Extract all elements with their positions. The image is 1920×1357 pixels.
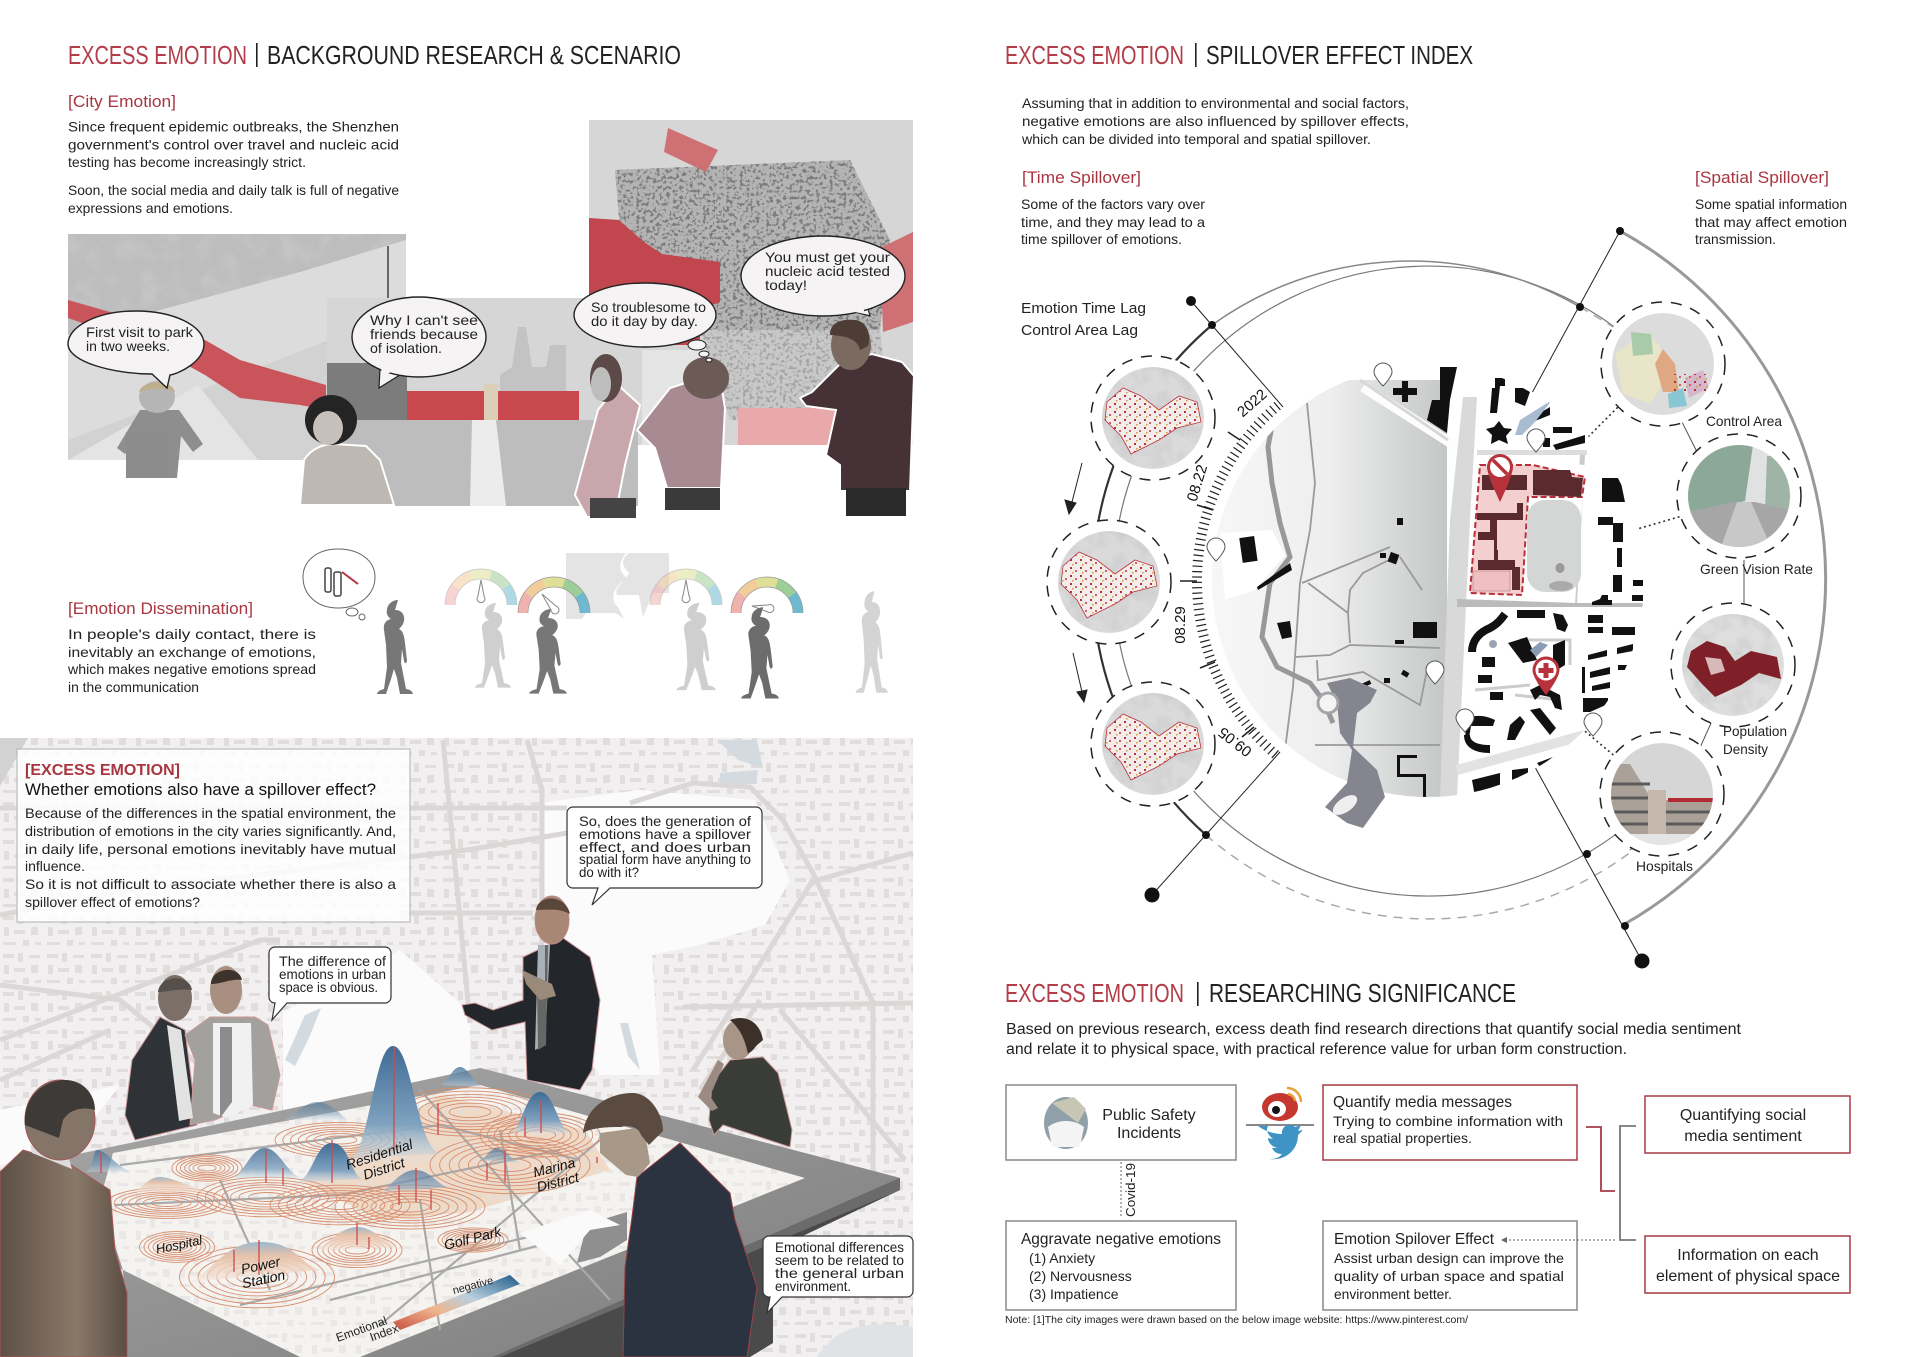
label: population density <box>1723 723 1787 757</box>
text block: emotion dissemination: In people's daily contact, there is <box>68 626 316 642</box>
text block: time spillover <box>1021 196 1205 247</box>
time tick scale <box>1180 402 1281 758</box>
gauge 3 <box>650 569 722 605</box>
box: public safety incidents <box>1006 1085 1236 1160</box>
heading: spatial spillover: [Spatial Spillover] <box>1695 168 1829 187</box>
text block: spatial spillover <box>1695 196 1847 247</box>
sports field <box>1527 500 1581 592</box>
person: man foreground <box>583 1093 757 1357</box>
box: aggravate negative emotions: (2) Nervousness <box>1029 1268 1132 1284</box>
box: quantify media messages: real spatial properties. <box>1333 1130 1472 1146</box>
circle: green vision <box>1677 434 1801 558</box>
callout: difference obvious: emotions in urban <box>279 966 386 982</box>
callout: difference obvious: The difference of <box>279 953 386 969</box>
text block: intro: negative emotions are also influenced by spillover effects, <box>1022 113 1409 129</box>
text block: city emotion: testing has become increasingly strict. <box>68 154 306 170</box>
callout: does generation: So, does the generation of <box>579 813 751 829</box>
icon: puzzle speech bubbles <box>566 553 669 619</box>
gauge 4 <box>731 577 803 613</box>
callout: emotional differences: environment. <box>775 1278 851 1294</box>
text block: significance intro: Based on previous research, excess death find research directions that quantify social media sentiment <box>1006 1021 1742 1038</box>
person: two men in suits <box>125 966 280 1140</box>
tick labels: 08.22 <box>1184 463 1211 504</box>
text block: intro: Assuming that in addition to environmental and social factors, <box>1022 95 1409 111</box>
text block: city emotion: Soon, the social media and daily talk is full of negative <box>68 182 399 198</box>
panel body: in daily life, personal emotions inevitably have mutual <box>25 841 396 857</box>
circle: hospitals <box>1600 732 1724 856</box>
map label: residential district <box>344 1136 420 1187</box>
bubble: first visit: in two weeks. <box>86 338 170 354</box>
connector: red bracket <box>1586 1127 1615 1191</box>
text block: significance intro: and relate it to physical space, with practical reference value for urban form construction. <box>1006 1041 1627 1058</box>
box: information on physical space <box>1645 1236 1850 1293</box>
labels: lag: Emotion Time Lag <box>1021 300 1146 317</box>
box: information on physical space: Information on each <box>1677 1247 1819 1264</box>
box: public safety incidents: Incidents <box>1117 1125 1181 1142</box>
circle: population density <box>1671 603 1795 727</box>
labels: lag: Control Area Lag <box>1021 322 1138 339</box>
bubble: troublesome: do it day by day. <box>591 313 698 329</box>
panel body: So it is not difficult to associate whether there is also a <box>25 876 396 892</box>
connector: gray bracket <box>1620 1126 1636 1240</box>
box: quantify media messages: Trying to combine information with <box>1333 1113 1563 1129</box>
panel body: spillover effect of emotions? <box>25 894 200 910</box>
gauge 1 <box>445 569 517 605</box>
text block: time spillover: Some of the factors vary over <box>1021 196 1205 212</box>
circle: time lag map 2 <box>1047 520 1171 644</box>
text block: time spillover: time, and they may lead to a <box>1021 214 1205 230</box>
heading: time spillover: [Time Spillover] <box>1022 168 1141 187</box>
box: information on physical space: element of physical space <box>1656 1268 1840 1285</box>
text block: city emotion: Since frequent epidemic outbreaks, the Shenzhen <box>68 118 399 134</box>
box: quantify media messages <box>1323 1085 1577 1160</box>
callout: does generation: spatial form have anything to <box>579 851 751 867</box>
legend: emotional index: negative <box>451 1275 495 1297</box>
callout: does generation <box>567 807 762 905</box>
callout: does generation: do with it? <box>579 864 639 880</box>
pin: prohibited <box>1487 454 1513 502</box>
person: woman holding head <box>300 395 394 505</box>
bubble: nucleic acid: today! <box>765 277 807 293</box>
text block: intro: which can be divided into temporal and spatial spillover. <box>1021 131 1371 147</box>
callout: difference obvious <box>269 947 391 1020</box>
panel body: distribution of emotions in the city varies significantly. And, <box>25 823 396 839</box>
box: aggravate negative emotions: (3) Impatience <box>1029 1286 1119 1302</box>
tick labels <box>1172 386 1270 760</box>
pins <box>1207 363 1602 736</box>
circle: control area map <box>1601 302 1725 426</box>
note: Note: [1]The city images were drawn based on the below image website: https://www.pinterest.com/ <box>1005 1315 1468 1326</box>
panel question: Whether emotions also have a spillover effect? <box>25 780 376 799</box>
diagram: orbit arcs <box>1093 231 1826 961</box>
photo: crowd with barriers <box>589 120 913 445</box>
needles <box>477 580 774 614</box>
label: population density: Density <box>1723 741 1768 757</box>
section title: spillover index: EXCESS EMOTION <box>1005 40 1184 70</box>
tick labels: 08.29 <box>1172 606 1189 644</box>
text block: city emotion: expressions and emotions. <box>68 200 233 216</box>
icon: thought bubble <box>303 549 375 620</box>
map label: marina district: Marina <box>531 1154 577 1180</box>
map label: hospital: Hospital <box>154 1232 205 1257</box>
arrows: time direction <box>1065 463 1087 702</box>
box: emotion spillover effect: environment better. <box>1334 1286 1452 1302</box>
map label: marina district <box>531 1154 581 1195</box>
person: man back left <box>0 1080 127 1357</box>
person: woman thinking <box>575 354 640 518</box>
box: quantifying social media sentiment: Quantifying social <box>1680 1107 1806 1124</box>
section title: background research: EXCESS EMOTION <box>68 40 247 70</box>
legend: emotional index <box>334 1275 520 1355</box>
label: green vision rate: Green Vision Rate <box>1700 561 1813 577</box>
emotion peaks <box>85 1046 597 1282</box>
panel body: Because of the differences in the spatial environment, the <box>25 805 396 821</box>
photo: checkpoint road <box>327 298 638 506</box>
tick labels: 2022 <box>1234 386 1270 421</box>
person: woman hand on hip <box>637 357 729 510</box>
person: man talking <box>800 320 914 516</box>
red control zone <box>1470 465 1585 595</box>
text block: spatial spillover: that may affect emotion <box>1695 214 1847 230</box>
text block: emotion dissemination <box>67 626 316 695</box>
heading: city emotion: [City Emotion] <box>68 92 176 111</box>
heading: emotion dissemination: [Emotion Dissemination] <box>68 599 253 618</box>
text block: emotion dissemination: in the communication <box>68 679 199 695</box>
panel: excess emotion question <box>17 749 410 922</box>
photo: road barrier street <box>68 234 406 460</box>
gauge 2 <box>518 577 590 613</box>
map label: marina district: District <box>535 1169 581 1195</box>
pin: hospital cross <box>1532 656 1560 695</box>
section title: background research <box>68 40 681 70</box>
legend: emotional index: Emotional <box>334 1313 389 1345</box>
box: aggravate negative emotions: (1) Anxiety <box>1029 1250 1095 1266</box>
bubble: first visit: First visit to park <box>86 324 194 340</box>
label: population density: Population <box>1723 723 1787 739</box>
box: aggravate negative emotions: Aggravate negative emotions <box>1021 1231 1221 1248</box>
bubble: isolation: friends because <box>370 326 478 342</box>
text block: time spillover: time spillover of emotions. <box>1021 231 1182 247</box>
thought dots <box>688 340 712 362</box>
legend: emotional index: Index <box>368 1321 400 1344</box>
map label: power station <box>238 1253 287 1291</box>
icon: twitter <box>1258 1125 1303 1159</box>
bubble: isolation: of isolation. <box>370 340 442 356</box>
connector: covid-19: Covid-19 <box>1123 1163 1138 1217</box>
section title: background research: BACKGROUND RESEARCH & SCENARIO <box>267 40 681 70</box>
text block: intro <box>1021 95 1409 147</box>
section title: researching significance <box>1005 978 1516 1008</box>
table <box>0 1068 900 1357</box>
bubble: nucleic acid <box>741 236 905 316</box>
text block: spatial spillover: transmission. <box>1695 231 1776 247</box>
icon: weibo <box>1262 1088 1301 1121</box>
divider <box>1246 1124 1314 1126</box>
lake <box>1318 678 1385 828</box>
bubble: isolation: Why I can't see <box>370 312 478 328</box>
section title: researching significance: RESEARCHING SIGNIFICANCE <box>1209 978 1516 1008</box>
callout: emotional differences: seem to be related to <box>775 1252 904 1268</box>
arrow: dotted to emotion spillover <box>1501 1237 1615 1243</box>
person: boy <box>117 381 203 478</box>
text block: emotion dissemination: which makes negative emotions spread <box>67 661 316 677</box>
box: emotion spillover effect: Emotion Spilover Effect <box>1334 1231 1495 1248</box>
box: emotion spillover effect: quality of urban space and spatial <box>1334 1268 1564 1284</box>
panel heading: [EXCESS EMOTION] <box>25 762 180 779</box>
box: emotion spillover effect: Assist urban design can improve the <box>1334 1250 1564 1266</box>
map label: power station: Power <box>239 1253 283 1277</box>
text block: spatial spillover: Some spatial information <box>1695 196 1847 212</box>
map: site plan circle <box>1212 350 1644 828</box>
labels: lag <box>1021 300 1146 339</box>
box: public safety incidents: Public Safety <box>1102 1107 1196 1124</box>
bubble: nucleic acid: You must get your <box>765 249 890 265</box>
bubble: first visit <box>68 311 204 388</box>
panel body <box>25 805 396 910</box>
section title: spillover index <box>1005 40 1473 70</box>
person: speaker <box>462 896 600 1090</box>
city map background <box>0 738 913 1357</box>
panel body: influence. <box>25 858 85 874</box>
box: emotion spillover effect <box>1323 1221 1577 1310</box>
callout: emotional differences: the general urban <box>775 1265 904 1281</box>
person: seated woman <box>698 1018 792 1147</box>
circle: time lag map 3 <box>1091 682 1215 806</box>
text block: city emotion <box>68 118 399 216</box>
label: hospitals: Hospitals <box>1636 858 1693 874</box>
silhouette figures <box>377 591 888 698</box>
callout: does generation: effect, and does urban <box>579 839 751 855</box>
bubble: nucleic acid: nucleic acid tested <box>765 263 890 279</box>
box: aggravate negative emotions <box>1006 1221 1236 1310</box>
bubble: isolation <box>352 297 486 388</box>
section title: researching significance: EXCESS EMOTION <box>1005 978 1184 1008</box>
map label: power station: Station <box>240 1266 287 1291</box>
contour lines <box>107 1088 600 1308</box>
callout: difference obvious: space is obvious. <box>279 979 378 995</box>
label: control area: Control Area <box>1706 413 1782 429</box>
text block: significance intro <box>1006 1021 1742 1058</box>
bubble: troublesome <box>574 283 716 347</box>
callout: emotional differences: Emotional differences <box>775 1239 904 1255</box>
callout: emotional differences <box>763 1236 913 1313</box>
text block: emotion dissemination: inevitably an exchange of emotions, <box>68 644 316 660</box>
map label: residential district: Residential <box>344 1136 415 1173</box>
map label: golf park: Golf Park <box>442 1223 504 1253</box>
circle: time lag map 1 <box>1091 356 1215 480</box>
box: quantify media messages: Quantify media messages <box>1333 1094 1512 1111</box>
bubble: troublesome: So troublesome to <box>591 299 706 315</box>
tick labels: 09.05 <box>1215 723 1255 760</box>
section title: spillover index: SPILLOVER EFFECT INDEX <box>1206 40 1473 70</box>
map label: residential district: District <box>361 1154 408 1183</box>
box: quantifying social media sentiment <box>1645 1096 1850 1153</box>
dots <box>1144 227 1650 968</box>
box: quantifying social media sentiment: media sentiment <box>1684 1128 1802 1145</box>
text block: city emotion: government's control over travel and nucleic acid <box>68 136 399 152</box>
callout: does generation: emotions have a spillover <box>579 826 751 842</box>
